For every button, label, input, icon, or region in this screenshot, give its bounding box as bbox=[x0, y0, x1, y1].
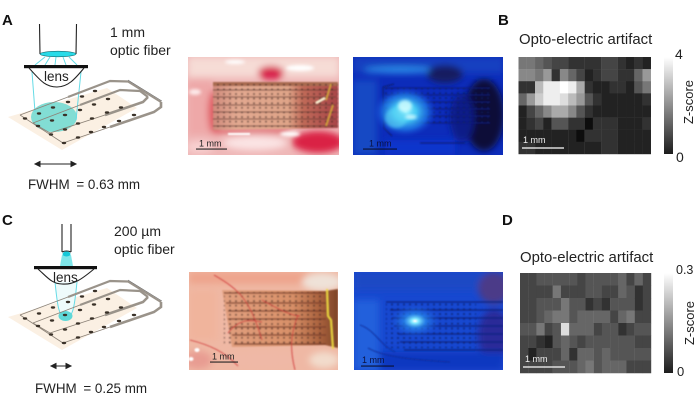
electrode array bbox=[20, 80, 162, 143]
heatmap title D: Opto-electric artifact bbox=[520, 250, 654, 266]
illumination spot bbox=[58, 311, 72, 321]
heatmap title B: Opto-electric artifact bbox=[519, 32, 653, 48]
colorbar ticks B bbox=[675, 46, 684, 165]
FWHM arrow bbox=[35, 162, 76, 166]
photo: array under blue light, panel C bbox=[354, 272, 510, 370]
colorbar D bbox=[664, 273, 673, 373]
panel label C: C bbox=[2, 212, 13, 229]
panel label A: A bbox=[2, 12, 13, 29]
electrode array bbox=[20, 280, 162, 343]
colorbar title D: Z-score bbox=[682, 301, 697, 345]
photo scale bar A1 bbox=[196, 138, 227, 150]
colorbar ticks B: 0 bbox=[676, 149, 684, 165]
heatmap scale bar D: 1 mm bbox=[525, 354, 548, 364]
photo scale bar A2: 1 mm bbox=[369, 138, 392, 148]
lens bbox=[24, 65, 88, 87]
colorbar ticks D: 0.3 bbox=[676, 263, 693, 277]
recording electrodes bbox=[23, 290, 136, 344]
photo scale bar C1: 1 mm bbox=[212, 352, 234, 362]
fiber label C: 200 µm bbox=[114, 223, 161, 239]
fiber label C: optic fiber bbox=[114, 241, 175, 257]
light beam bbox=[32, 57, 81, 120]
photo scale bar C2 bbox=[361, 355, 394, 367]
photo scale bar A2 bbox=[363, 138, 397, 150]
illumination spot bbox=[31, 102, 77, 132]
fiber label A: 1 mm bbox=[110, 24, 145, 40]
FWHM label C: FWHM = 0.25 mm bbox=[35, 381, 147, 396]
brain surface under array bbox=[8, 88, 137, 150]
brain surface under array bbox=[8, 288, 137, 350]
FWHM label A: FWHM = 0.63 mm bbox=[28, 177, 140, 192]
heatmap D bbox=[520, 273, 651, 373]
colorbar title B: Z-score bbox=[681, 80, 696, 124]
light beam bbox=[55, 282, 77, 318]
heatmap scale bar B: 1 mm bbox=[523, 135, 546, 145]
fiber tip light bbox=[60, 252, 73, 266]
lens bbox=[34, 266, 97, 285]
panel label D: D bbox=[502, 212, 513, 229]
colorbar ticks D bbox=[676, 263, 693, 379]
photo scale bar C2: 1 mm bbox=[362, 355, 384, 365]
colorbar ticks D: 0 bbox=[677, 364, 684, 379]
panel A: optic setup diagram, 1 mm fiber bbox=[8, 24, 162, 166]
panel C: optic setup diagram, 200 um fiber bbox=[8, 224, 162, 368]
lens: lens bbox=[44, 69, 69, 84]
fiber bbox=[40, 24, 76, 54]
FWHM arrow bbox=[51, 364, 71, 368]
photo scale bar A1: 1 mm bbox=[199, 138, 222, 148]
colorbar B bbox=[664, 57, 673, 154]
fiber tip bbox=[40, 51, 76, 57]
photo: array on brain, white light, panel C bbox=[184, 272, 342, 370]
lens: lens bbox=[53, 270, 78, 285]
heatmap B bbox=[518, 57, 651, 154]
fiber label A: optic fiber bbox=[110, 42, 171, 58]
recording electrodes bbox=[23, 90, 136, 144]
fiber bbox=[62, 224, 71, 252]
photo: array on brain, white light, panel A bbox=[186, 57, 344, 155]
panel label B: B bbox=[498, 12, 509, 29]
colorbar ticks B: 4 bbox=[675, 46, 683, 62]
photo: array under blue light, panel A bbox=[353, 57, 504, 155]
